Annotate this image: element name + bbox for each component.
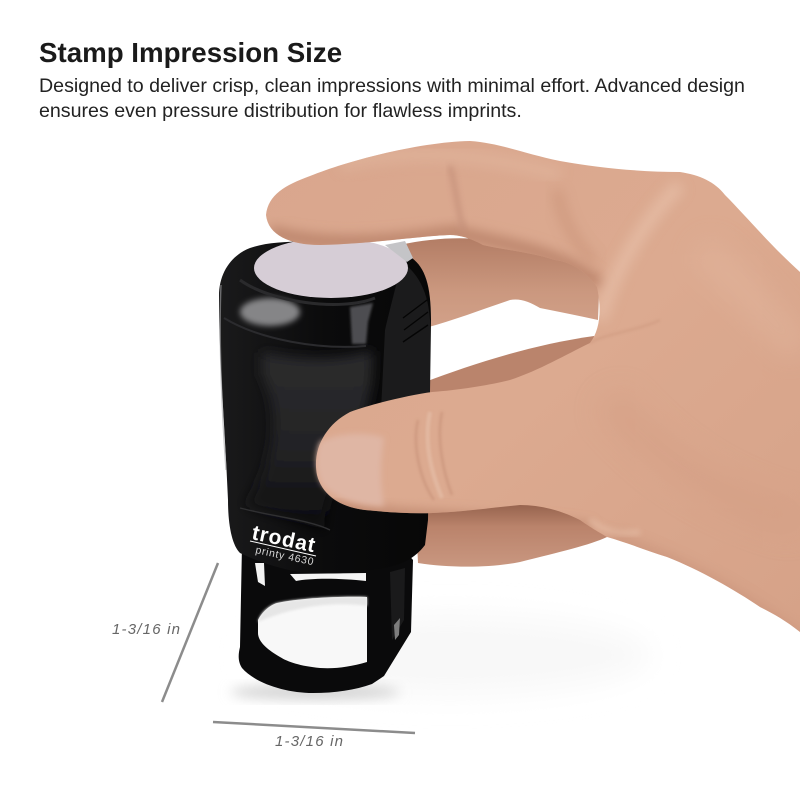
stamp base frame: [239, 545, 413, 693]
right window details: [390, 568, 405, 640]
soft shadow under stamp: [230, 615, 650, 700]
description: [39, 75, 745, 122]
left edge highlight: [220, 285, 226, 470]
hand crease: [590, 320, 660, 343]
cap right highlight: [350, 303, 373, 344]
side window: [255, 563, 265, 586]
description: ensures even pressure distribution for flawless imprints.: [39, 100, 522, 122]
hand shading: [270, 155, 800, 640]
little finger under thumb: [415, 500, 607, 567]
lower body panel line: [240, 508, 330, 530]
hand: index finger, palm and thumb: [266, 141, 800, 640]
stamp logo: trodat: [250, 521, 318, 557]
body sheen: [245, 350, 372, 530]
stamp: [219, 238, 431, 693]
upper window: [290, 573, 366, 581]
stamp body: [219, 242, 431, 573]
dimension line: width: [213, 722, 415, 733]
thumbnail: [316, 434, 384, 506]
dimension label: width: 1-3/16 in: [275, 733, 344, 750]
middle finger behind stamp: [400, 238, 600, 328]
stamp logo: printy 4630: [254, 544, 315, 568]
base opening: [258, 597, 367, 668]
title: Stamp Impression Size: [39, 37, 342, 68]
ring finger sliver: [425, 336, 596, 398]
cap band arcs: [224, 318, 366, 347]
dimension line: height: [162, 563, 218, 702]
stamp top window: [254, 238, 408, 298]
right body panel: [380, 262, 430, 430]
illustration: hand holding stamp: [112, 141, 800, 746]
knuckle wrinkles: [416, 412, 452, 500]
dimension label: height: 1-3/16 in: [112, 621, 181, 638]
description: Designed to deliver crisp, clean impressions with minimal effort. Advanced design: [39, 75, 745, 97]
cap highlight: [240, 298, 300, 326]
